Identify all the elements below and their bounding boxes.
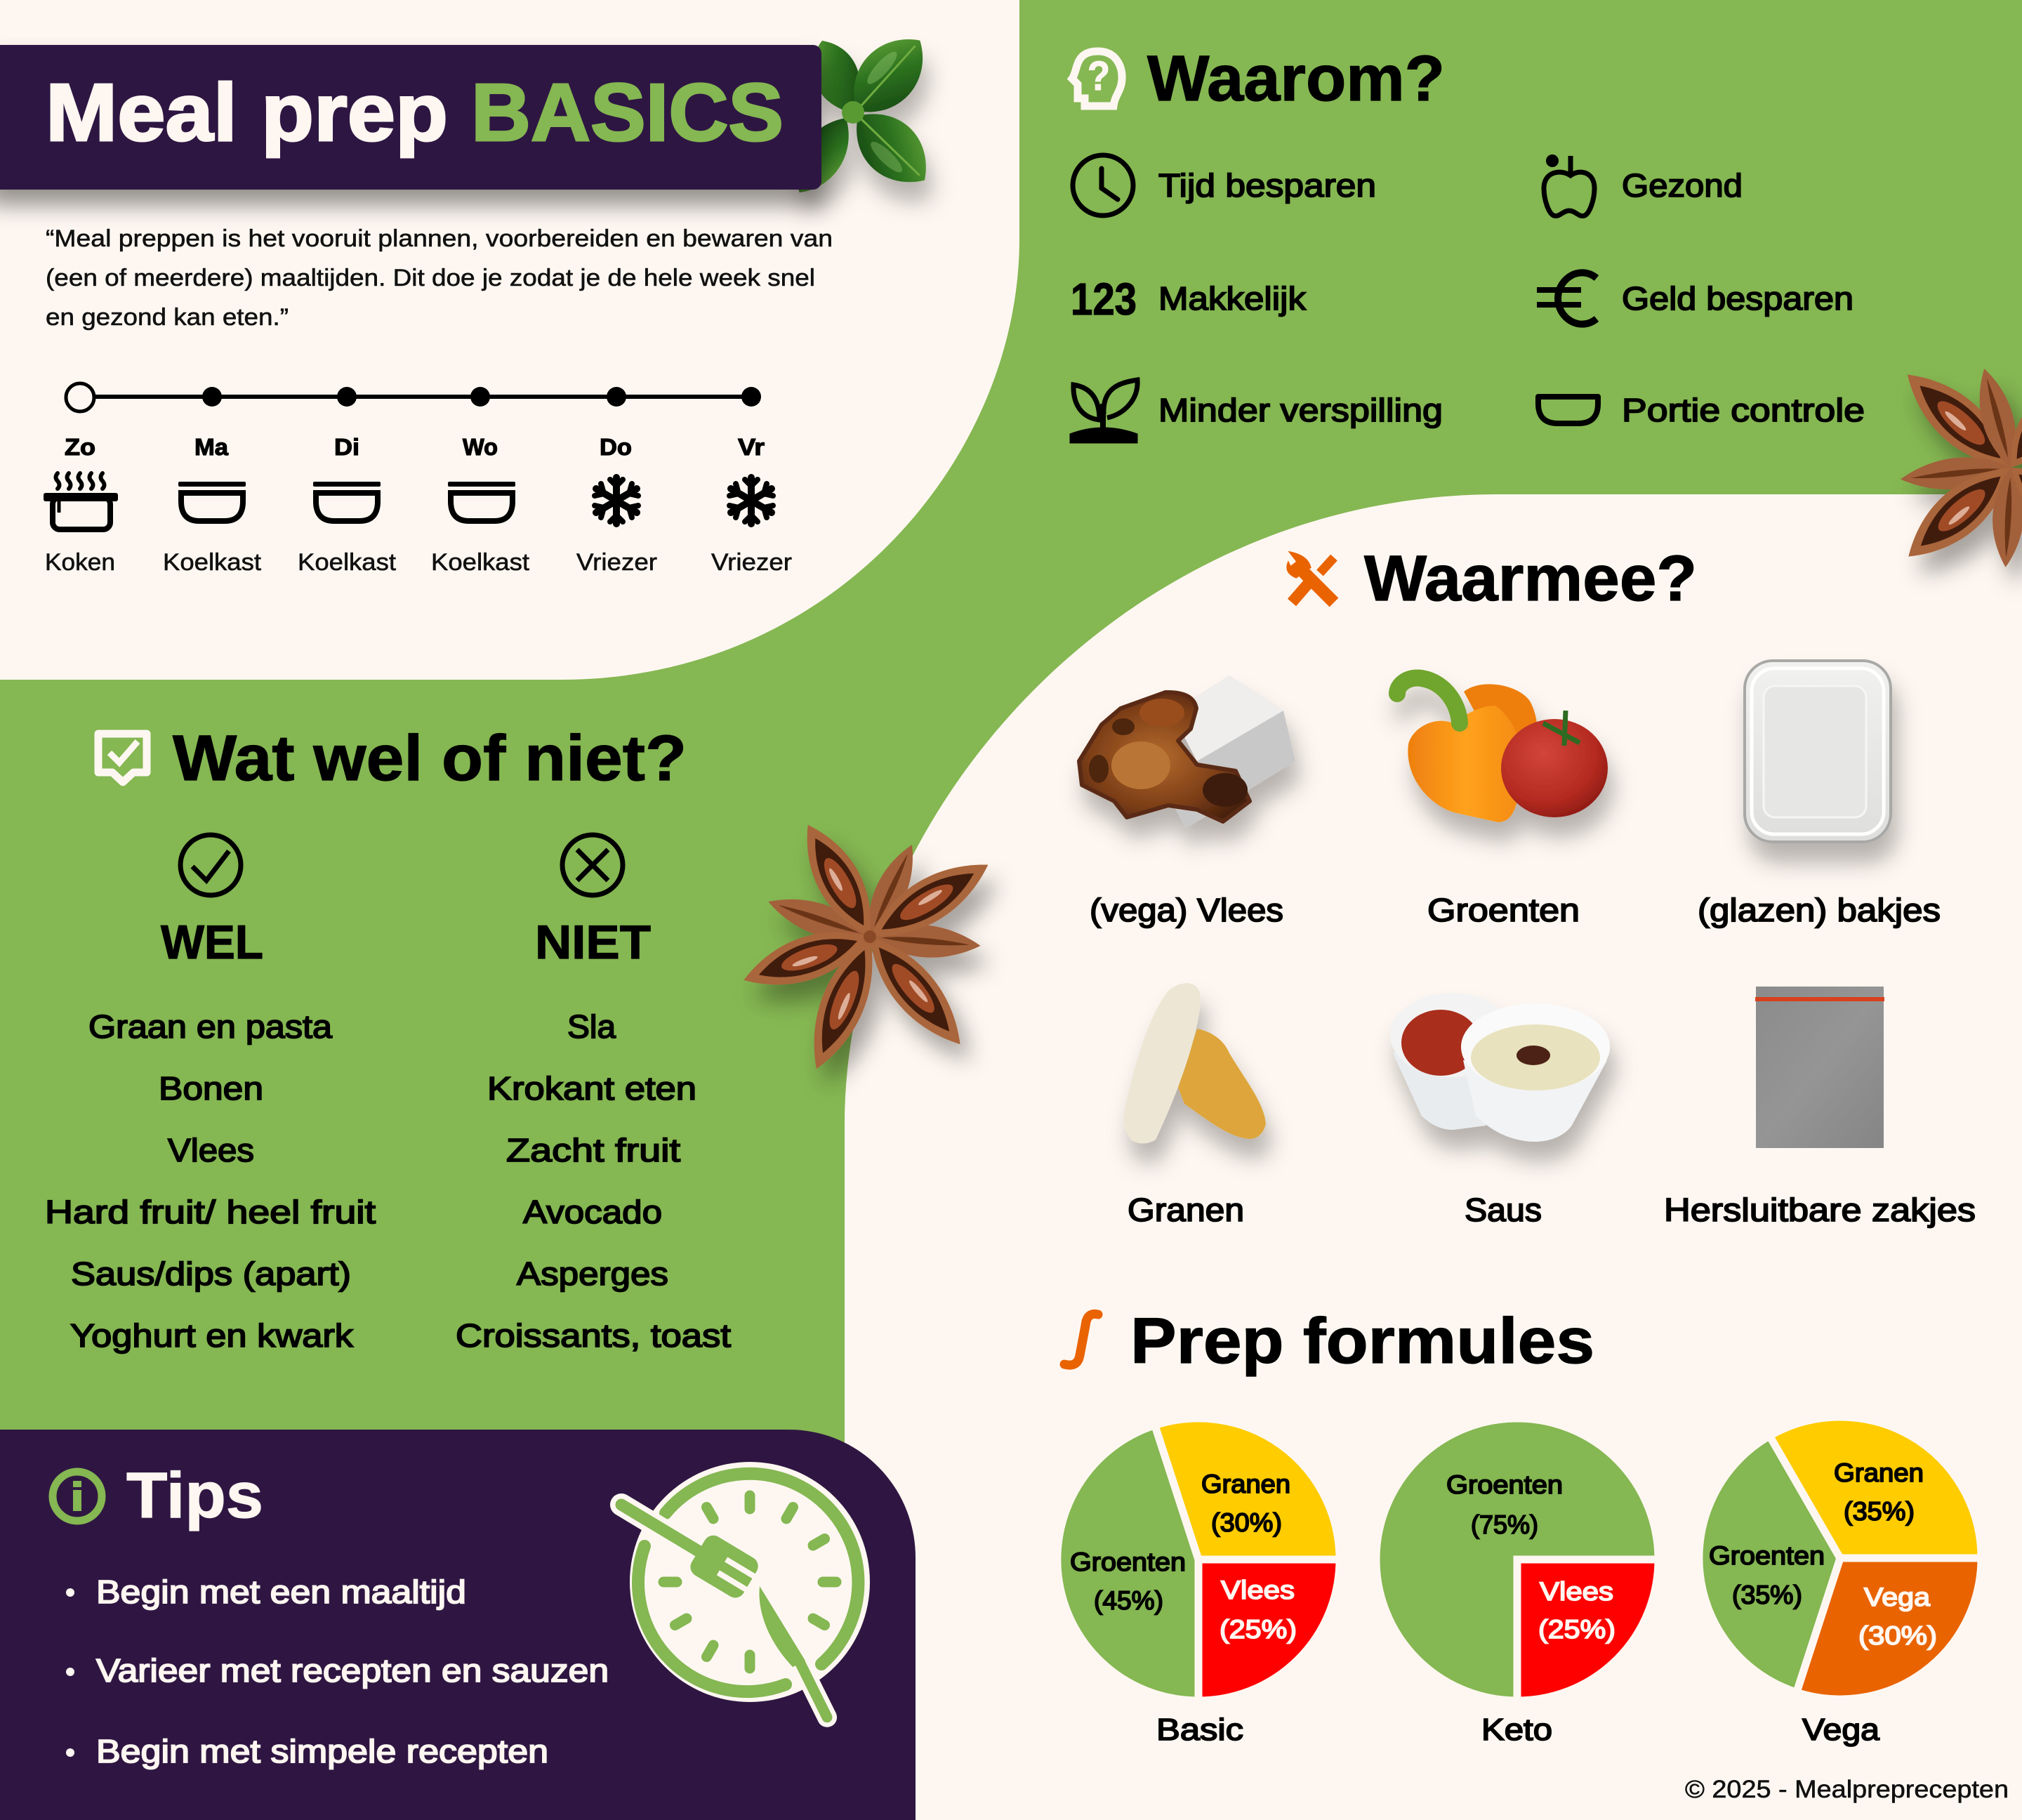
icon: head with question mark: ? xyxy=(1088,53,1110,99)
benefit: Geld besparen: Geld besparen xyxy=(1622,280,1853,317)
icon: head with question mark xyxy=(1072,51,1122,106)
pie labels: Vega: Groenten xyxy=(1709,1541,1825,1570)
panel: tips xyxy=(0,1430,916,1820)
timeline storage labels: Koelkast xyxy=(298,549,397,576)
pie labels: Keto: (25%) xyxy=(1538,1615,1615,1644)
image: chicken and tofu xyxy=(1079,675,1295,829)
timeline storage labels: Koelkast xyxy=(431,549,530,576)
column: WEL: Vlees xyxy=(168,1132,254,1168)
pie labels: Basic: (30%) xyxy=(1211,1508,1282,1537)
pie labels: Basic xyxy=(1070,1470,1297,1644)
column: WEL xyxy=(45,835,376,1354)
timeline day labels xyxy=(65,434,765,460)
timeline storage labels: Koelkast xyxy=(163,549,262,576)
column: NIET xyxy=(456,835,731,1354)
icon: fridge bowl Di xyxy=(313,482,381,521)
icon: cross circle xyxy=(562,835,623,895)
copyright: © 2025 - Mealpreprecepten xyxy=(1685,1776,2009,1803)
icon: cooking pot xyxy=(44,473,118,529)
image: sauce cups xyxy=(1390,993,1610,1142)
timeline day labels: Do xyxy=(600,434,632,460)
pie chart: Vega xyxy=(1699,1417,1981,1699)
column: NIET: Sla xyxy=(567,1008,616,1045)
icon: check speech bubble xyxy=(98,734,147,782)
label: Granen: Granen xyxy=(1128,1192,1244,1228)
pie labels: Vega: (30%) xyxy=(1858,1621,1937,1650)
pie labels: Keto: Groenten xyxy=(1446,1470,1563,1499)
pie labels: Vega: Granen xyxy=(1834,1458,1924,1487)
icon: clock xyxy=(1073,155,1133,216)
icon: snowflake Do xyxy=(595,477,638,524)
icon: integral sign xyxy=(1064,1314,1098,1365)
quote text: en gezond kan eten.” xyxy=(46,304,289,331)
timeline storage labels: Vriezer xyxy=(711,549,792,576)
timeline day labels: Zo xyxy=(65,434,95,460)
column: NIET: Asperges xyxy=(517,1255,668,1292)
title banner xyxy=(0,45,821,190)
pie labels: Vega: (35%) xyxy=(1844,1497,1915,1526)
image: glass container xyxy=(1745,661,1891,842)
pie labels: Basic: Granen xyxy=(1201,1470,1290,1498)
heading: Waarom?: Waarom? xyxy=(1147,43,1445,114)
pie captions: Vega xyxy=(1802,1713,1880,1747)
title text: BASICS: BASICS xyxy=(471,67,784,158)
pie labels: Keto: (75%) xyxy=(1471,1510,1538,1539)
tips list: Begin met simpele recepten xyxy=(96,1733,548,1769)
column: NIET: NIET xyxy=(535,916,651,969)
column: WEL: Saus/dips (apart) xyxy=(71,1255,351,1292)
benefit: Gezond: Gezond xyxy=(1622,167,1743,204)
icon: info xyxy=(53,1472,102,1521)
pie captions: Basic xyxy=(1156,1713,1243,1747)
icon: snowflake Vr xyxy=(729,477,773,524)
timeline storage labels: Koken xyxy=(45,549,115,576)
heading: Wat wel of niet?: Wat wel of niet? xyxy=(173,723,687,794)
pie labels: Basic: Groenten xyxy=(1070,1548,1186,1576)
pie labels: Vega: (35%) xyxy=(1732,1581,1802,1609)
icon: 123: 123 xyxy=(1071,274,1137,324)
label: Groenten: Groenten xyxy=(1427,892,1580,928)
pie chart: Basic xyxy=(1057,1418,1340,1701)
column: WEL: Graan en pasta xyxy=(88,1008,332,1045)
benefit: Makkelijk: Makkelijk xyxy=(1158,280,1307,317)
column: NIET: Croissants, toast xyxy=(456,1317,731,1354)
timeline day labels: Vr xyxy=(738,434,765,460)
icon: apple xyxy=(1544,154,1594,216)
column: NIET: Krokant eten xyxy=(487,1070,696,1107)
pie labels: Keto xyxy=(1446,1470,1615,1644)
timeline xyxy=(66,383,761,411)
label: (vega) Vlees: (vega) Vlees xyxy=(1090,892,1283,928)
timeline day labels: Wo xyxy=(463,434,498,460)
quote text: “Meal preppen is het vooruit plannen, voorbereiden en bewaren van xyxy=(46,225,833,252)
timeline storage labels: Vriezer xyxy=(576,549,657,576)
pie labels: Basic: Vlees xyxy=(1221,1576,1295,1604)
heading: Prep formules: Prep formules xyxy=(1130,1305,1594,1377)
panel: right cream area xyxy=(845,494,2022,1820)
tips list xyxy=(66,1574,609,1769)
column: WEL: Bonen xyxy=(159,1070,263,1107)
icon: plate clock with cutlery xyxy=(610,1462,870,1724)
icon: check circle xyxy=(180,835,241,895)
column: NIET: Zacht fruit xyxy=(506,1132,680,1168)
pie labels: Vega xyxy=(1709,1458,1937,1650)
benefit: Portie controle: Portie controle xyxy=(1622,392,1865,428)
tips list: Begin met een maaltijd xyxy=(96,1574,466,1610)
pie captions xyxy=(1156,1713,1880,1747)
pie labels: Vega: Vega xyxy=(1864,1583,1930,1611)
label: Hersluitbare zakjes: Hersluitbare zakjes xyxy=(1664,1192,1976,1228)
image: star anise left xyxy=(736,815,999,1077)
pie labels: Basic: (45%) xyxy=(1094,1586,1163,1615)
benefit: Tijd besparen: Tijd besparen xyxy=(1158,167,1376,204)
icon: fridge bowl Wo xyxy=(448,482,515,521)
pie chart: Keto xyxy=(1376,1418,1658,1701)
column: WEL: Hard fruit/ heel fruit xyxy=(45,1194,376,1230)
heading: Tips: Tips xyxy=(126,1460,263,1531)
icon: tools xyxy=(1288,553,1334,602)
image: star anise right xyxy=(1892,357,2022,574)
timeline day labels: Ma xyxy=(194,434,229,460)
timeline day labels: Di xyxy=(334,434,359,460)
icon: euro xyxy=(1537,272,1597,324)
label: Saus: Saus xyxy=(1465,1192,1542,1228)
quote text: (een of meerdere) maaltijden. Dit doe je zodat je de hele week snel xyxy=(46,265,815,291)
pie labels: Keto: Vlees xyxy=(1540,1577,1613,1606)
image: bell pepper and tomato xyxy=(1397,678,1608,822)
pie captions: Keto xyxy=(1481,1713,1552,1747)
image: grains bread xyxy=(1124,983,1266,1143)
icon: sprout xyxy=(1072,380,1137,441)
label: (glazen) bakjes: (glazen) bakjes xyxy=(1698,892,1941,928)
heading: Waarmee?: Waarmee? xyxy=(1364,543,1697,614)
column: WEL: WEL xyxy=(161,916,263,969)
pie labels: Basic: (25%) xyxy=(1220,1615,1297,1644)
tips list: Varieer met recepten en sauzen xyxy=(96,1652,609,1689)
column: WEL: Yoghurt en kwark xyxy=(70,1317,354,1354)
column: NIET: Avocado xyxy=(523,1194,662,1230)
icon: portion bowl xyxy=(1538,397,1598,423)
quote text xyxy=(46,225,833,331)
icon: fridge bowl Ma xyxy=(178,482,246,521)
benefit: Minder verspilling: Minder verspilling xyxy=(1158,392,1443,428)
timeline storage labels xyxy=(45,549,792,576)
image: resealable bag xyxy=(1755,987,1884,1148)
title text: Meal prep: Meal prep xyxy=(46,67,448,158)
image: basil leaves xyxy=(782,22,944,204)
panel: top-left cream area xyxy=(0,0,1019,680)
